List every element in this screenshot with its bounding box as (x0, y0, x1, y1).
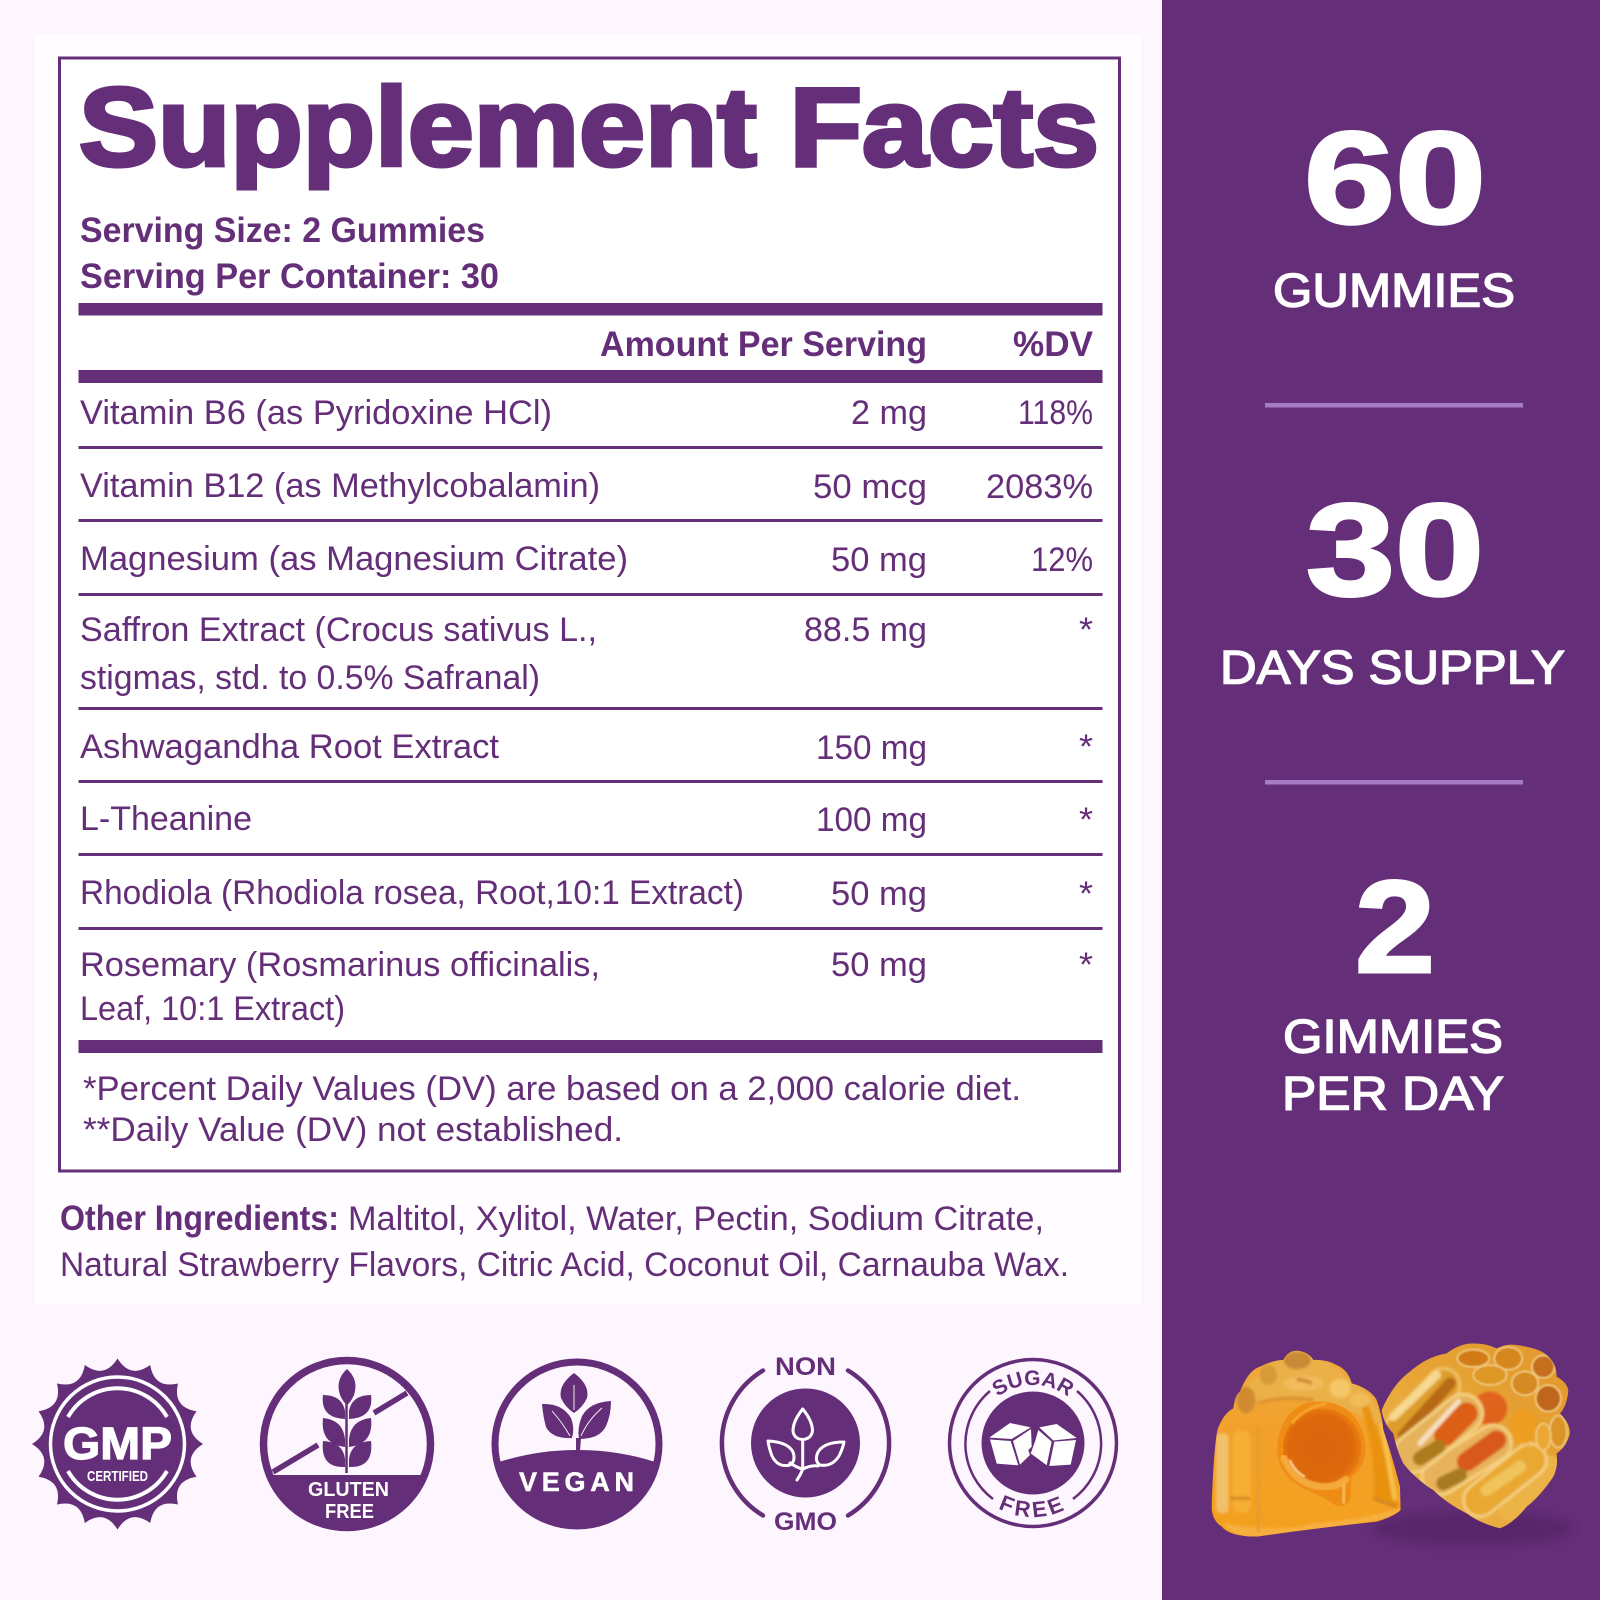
stat: 2 gummies per day: GIMMIES (1283, 1010, 1503, 1062)
stat: 2 gummies per day: 2 (1355, 853, 1435, 1000)
row: L-theanine: 100 mg (816, 801, 927, 839)
badge: gluten free: GLUTEN (308, 1478, 389, 1501)
icon: sprout (768, 1409, 844, 1480)
panel: white label background (35, 35, 1141, 1304)
stat: 30 days supply (1220, 476, 1565, 694)
row: L-theanine: L-Theanine (80, 800, 252, 838)
row: saffron: stigmas, std. to 0.5% Safranal) (80, 659, 540, 697)
icon: wheat (323, 1369, 371, 1473)
badge: GMP certified: GMP (63, 1418, 172, 1469)
row: vitamin B6: Vitamin B6 (as Pyridoxine HCl) (80, 394, 552, 432)
badge: GMP certified: CERTIFIED (87, 1468, 148, 1485)
badge: vegan (495, 1362, 659, 1527)
row: rosemary: 50 mg (831, 946, 927, 984)
row: rhodiola (80, 874, 1093, 913)
badge: gluten free: FREE (325, 1500, 374, 1523)
right gummy (1382, 1344, 1570, 1528)
row: vitamin B12: 2083% (986, 468, 1093, 506)
badge: sugar free: FREE (999, 1495, 1064, 1518)
row: rhodiola: Rhodiola (Rhodiola rosea, Root,10:1 Extract) (80, 874, 744, 912)
row: L-theanine: * (1079, 801, 1093, 839)
row: rosemary: Leaf, 10:1 Extract) (80, 990, 345, 1028)
row: vitamin B6: 2 mg (851, 394, 927, 432)
stat: 30 days supply: DAYS SUPPLY (1220, 640, 1565, 694)
panel: supplement facts label (60, 58, 1120, 1171)
title: Supplement Facts (79, 66, 1099, 190)
badge: non GMO: NON (775, 1353, 836, 1381)
row: L-theanine (80, 800, 1093, 839)
row: saffron: 88.5 mg (804, 611, 927, 649)
row: vitamin B12: 50 mcg (813, 468, 927, 506)
row: magnesium: Magnesium (as Magnesium Citrate) (80, 540, 628, 578)
badge: non GMO: GMO (774, 1508, 837, 1536)
row: saffron: * (1079, 611, 1093, 649)
row: rosemary: * (1079, 946, 1093, 984)
footnotes (83, 1070, 1021, 1149)
stat: 2 gummies per day (1282, 853, 1504, 1120)
table header: %DV (1013, 325, 1094, 364)
row: magnesium: 50 mg (831, 541, 927, 579)
panel: purple sidebar (1162, 0, 1600, 1600)
serving info (80, 211, 499, 296)
row: magnesium: 12% (1031, 541, 1093, 579)
crossed slash (273, 1393, 407, 1472)
other ingredients: Natural Strawberry Flavors, Citric Acid, Coconut Oil, Carnauba Wax. (60, 1246, 1069, 1284)
row: vitamin B12 (80, 467, 1093, 506)
stat: 60 gummies: 60 (1304, 104, 1486, 251)
row: ashwagandha: 150 mg (816, 729, 927, 767)
row: saffron: Saffron Extract (Crocus sativus L., (80, 611, 597, 649)
table header: Amount Per Serving (600, 325, 927, 364)
row: rosemary (80, 946, 1093, 1028)
serving info: Serving Size: 2 Gummies (80, 211, 485, 250)
footnotes: **Daily Value (DV) not established. (83, 1111, 623, 1149)
row: rhodiola: * (1079, 875, 1093, 913)
row: ashwagandha: * (1079, 728, 1093, 766)
gummies illustration (1207, 1337, 1577, 1545)
row: magnesium (80, 540, 1093, 579)
row: rosemary: Rosemary (Rosmarinus officinalis, (80, 946, 600, 984)
badge: vegan: VEGAN (519, 1467, 634, 1497)
serving info: Serving Per Container: 30 (80, 257, 499, 296)
other ingredients (60, 1199, 1069, 1284)
icon: sugar cubes (989, 1423, 1077, 1466)
other ingredients: Maltitol, Xylitol, Water, Pectin, Sodium Citrate, (348, 1200, 1044, 1238)
badge: GMP certified (32, 1358, 203, 1530)
badge: gluten free (264, 1360, 430, 1531)
stat: 2 gummies per day: PER DAY (1282, 1066, 1504, 1120)
badge: non GMO (722, 1353, 889, 1536)
row: ashwagandha: Ashwagandha Root Extract (80, 728, 500, 766)
left gummy (1212, 1350, 1401, 1537)
row: vitamin B6: 118% (1018, 394, 1093, 432)
row: vitamin B12: Vitamin B12 (as Methylcobalamin) (80, 467, 600, 505)
gummy filling (1277, 1401, 1366, 1506)
table header (600, 325, 1094, 364)
row: rhodiola: 50 mg (831, 875, 927, 913)
badge: sugar free (948, 1358, 1118, 1528)
stat: 60 gummies (1273, 104, 1515, 316)
row: vitamin B6 (80, 394, 1093, 432)
footnotes: *Percent Daily Values (DV) are based on a 2,000 calorie diet. (83, 1070, 1021, 1108)
stat: 60 gummies: GUMMIES (1273, 264, 1515, 316)
row: ashwagandha (80, 728, 1093, 767)
badge: sugar free: SUGAR (992, 1370, 1074, 1396)
stat: 30 days supply: 30 (1306, 476, 1484, 623)
icon: plant (542, 1373, 611, 1451)
other ingredients: Other Ingredients: (60, 1199, 339, 1238)
row: saffron (80, 611, 1093, 697)
